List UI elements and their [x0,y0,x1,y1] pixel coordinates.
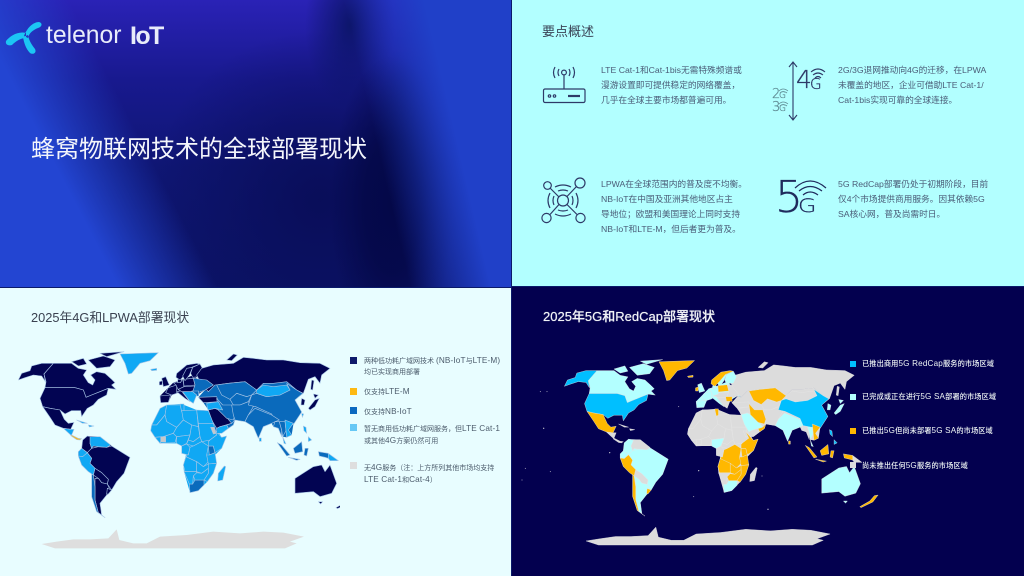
text: LPWA: LPWA在全球范围内的普及度不均衡。 [601,178,747,188]
text: 2G/3G retirement: 2G/3G退网推动向4G的迁移，在LPWA [838,64,986,74]
icon: 5G [775,175,826,220]
text: LPWA: 导地位；欧盟和美国理论上同时支持 [601,208,740,218]
legend item: both technologies: 均已实现商用部署 [364,369,420,376]
icon: 2G 3G to 4G migration [772,61,826,121]
icon: 2G 3G to 4G migration: 2 [772,87,780,102]
icon: LPWA mesh [541,177,586,224]
text: LPWA: NB-IoT在中国及亚洲其他地区占主 [601,194,733,204]
legend item: no 4G: 无4G服务（注：上方所列其他市场均支持 [364,463,494,472]
wordmark [46,22,164,50]
panel: 5G and RedCap map [512,287,1024,576]
legend item: no 4G [350,462,494,484]
text: 5G RedCap [838,178,988,218]
text: 5G RedCap: 仅4个市场提供商用服务。因其依赖5G [838,194,985,204]
panel: 4G and LPWA map [0,288,511,576]
panel: cover [0,0,511,287]
legend item: 5G SA: 已完成或正在进行5G SA部署的市场区域 [862,392,996,401]
legend item: no LPWA: 暂无商用低功耗广域网服务，但LTE Cat-1 [364,424,500,433]
legend item: NB-IoT: 仅支持NB-IoT [364,407,412,416]
text: 5G RedCap: SA核心网，普及尚需时日。 [838,208,945,218]
text: 2G/3G retirement: 未覆盖的地区，企业可借助LTE Cat-1/ [838,80,984,90]
logo [6,22,164,54]
text: 5G RedCap: 5G RedCap部署仍处于初期阶段，目前 [838,178,988,188]
heading: 要点概述 [542,24,594,39]
legend item: LTE-M: 仅支持LTE-M [364,387,410,396]
title: 蜂窝物联网技术的全球部署现状 [31,136,367,163]
world map: LPWA [18,351,340,548]
legend item: RedCap: 已推出商用5G RedCap服务的市场区域 [862,359,994,368]
legend [350,356,500,484]
text: 2G/3G retirement: Cat-1bis实现可靠的全球连接。 [838,94,957,104]
icon: 2G 3G to 4G migration: G [779,91,786,101]
text: 2G/3G retirement [838,64,986,104]
icon: 2G 3G to 4G migration: G [810,75,822,93]
icon: 2G 3G to 4G migration: 3 [772,100,780,115]
text: LPWA [601,178,747,234]
icon: telenor propeller [6,22,42,54]
text: LTE Cat-1 [601,64,742,104]
icon: 2G 3G to 4G migration: G [779,104,786,114]
text: LTE Cat-1: 几乎在全球主要市场都普遍可用。 [601,94,731,104]
heading: 2025年5G和RedCap部署现状 [543,309,715,324]
world map: 5G [522,359,878,546]
icon: 5G: G [798,195,816,217]
heading: 2025年4G和LPWA部署现状 [31,310,189,325]
legend item: no LPWA: 或其他4G方案仍然可用 [364,436,438,445]
wordmark: telenor [46,22,122,49]
legend item: 5G without SA: 已推出5G但尚未部署5G SA的市场区域 [862,426,993,435]
text: LTE Cat-1: LTE Cat-1和Cat-1bis无需特殊频谱或 [601,64,742,74]
icon: 2G 3G to 4G migration: 4 [796,65,812,94]
text: LTE Cat-1: 漫游设置即可提供稳定的网络覆盖， [601,80,740,90]
legend item: no 4G: LTE Cat-1和Cat-4） [364,475,437,484]
legend item: both technologies [350,356,500,376]
panel: key points [512,0,1024,286]
legend item: both technologies: 两种低功耗广域网技术 (NB-IoT与LTE-M) [364,356,500,365]
legend item: no 5G: 尚未推出任何5G服务的市场区域 [862,461,968,470]
icon: router [542,66,586,104]
text: LPWA: NB-IoT和LTE-M，但后者更为普及。 [601,224,741,234]
logo: IoT [130,22,163,50]
legend item: no LPWA [350,424,500,445]
legend [850,359,996,470]
